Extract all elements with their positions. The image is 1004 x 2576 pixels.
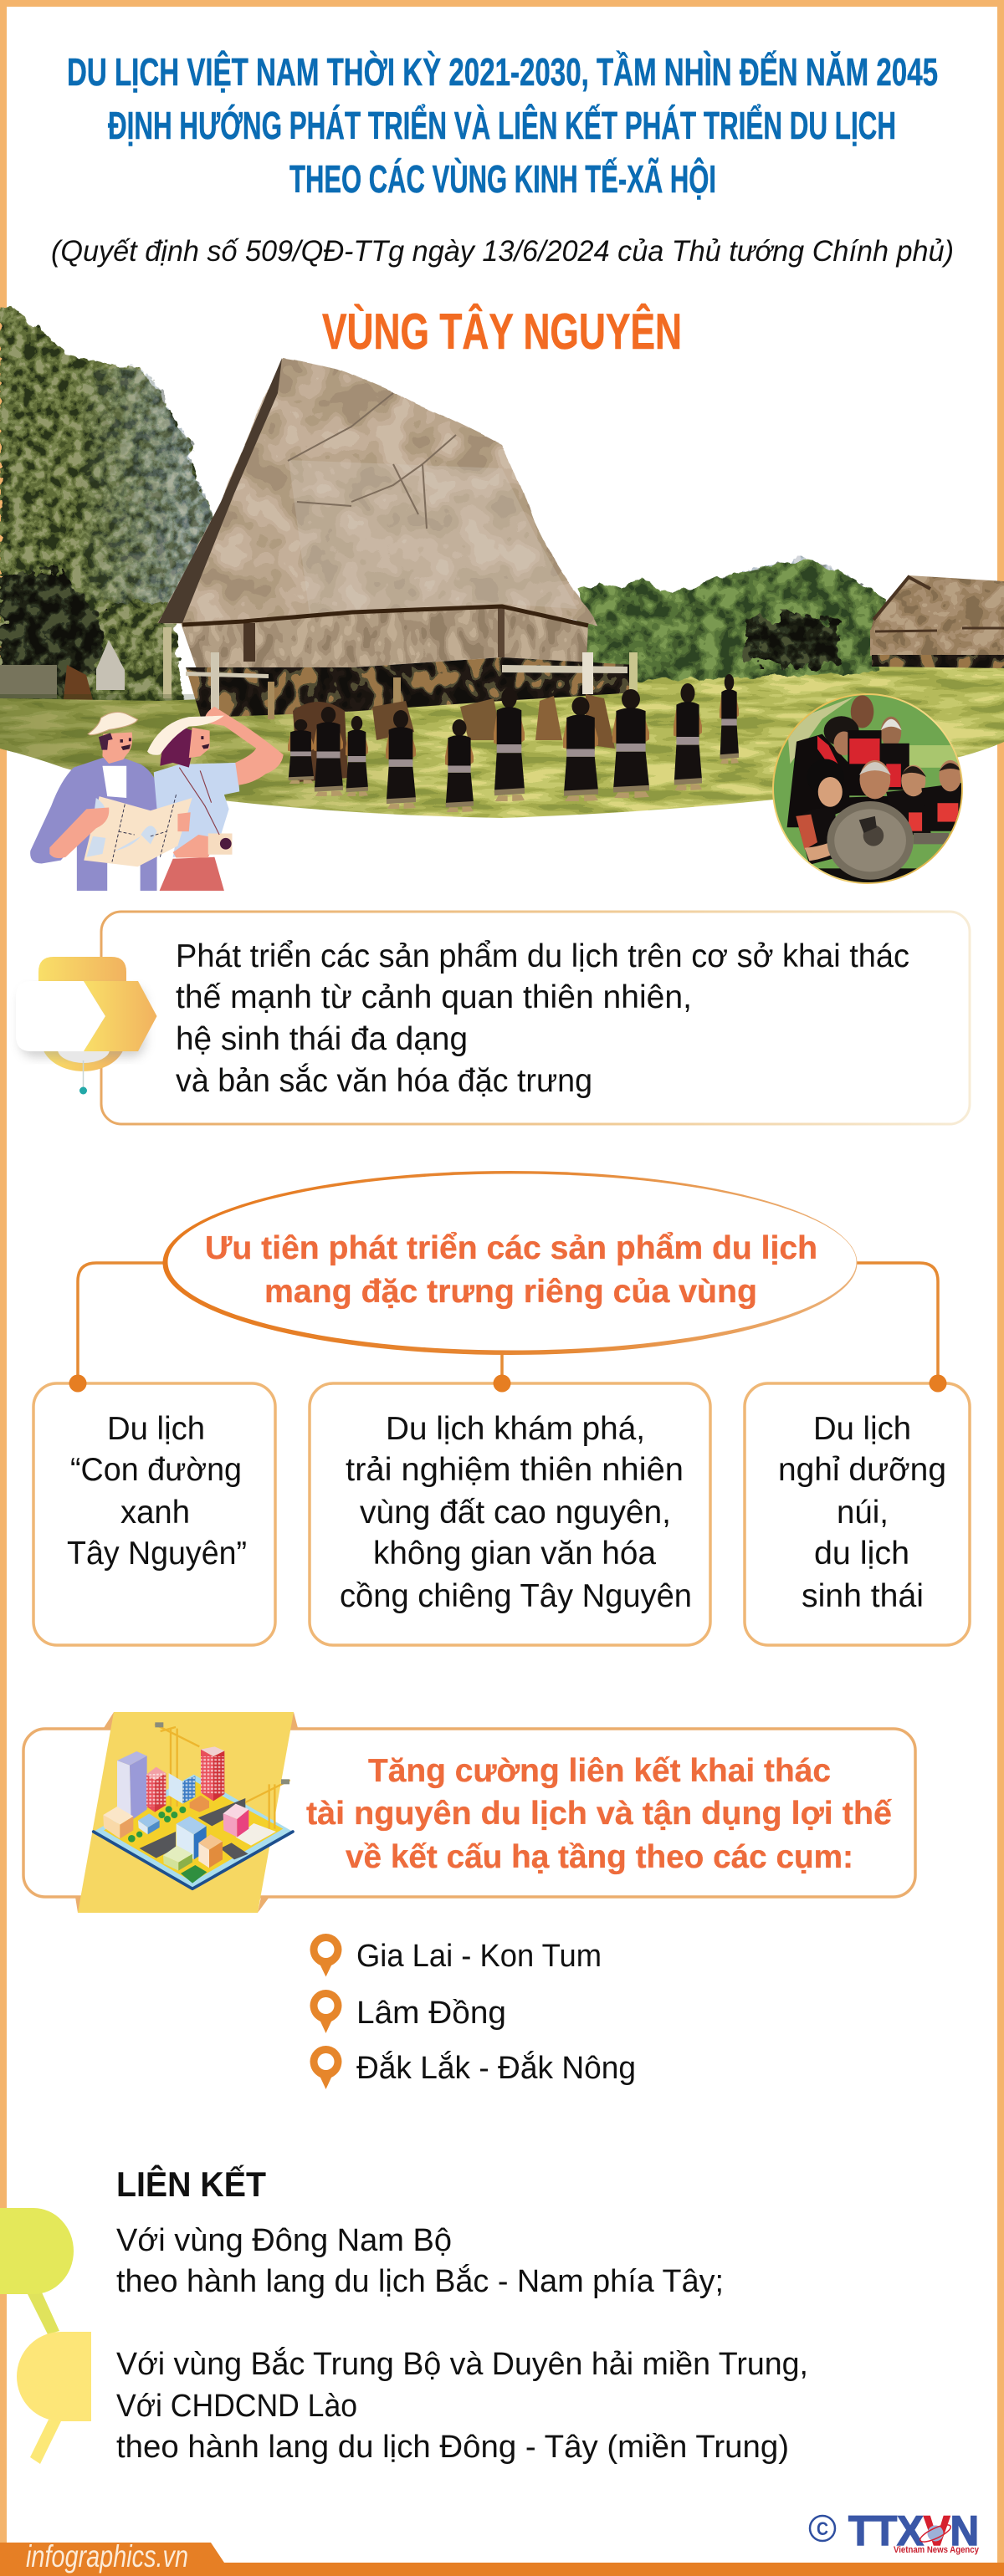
box: exploration tourism: cồng chiêng Tây Nguyên — [340, 1578, 692, 1614]
woman raised arm — [205, 707, 284, 785]
subtitle: decision reference: (Quyết định số 509/QĐ-TTg ngày 13/6/2024 của Thủ tướng Chính phủ) — [51, 235, 954, 268]
camera — [208, 833, 232, 855]
icon: two tourists with map — [30, 707, 284, 891]
box: exploration tourism: không gian văn hóa — [373, 1536, 656, 1572]
shop — [138, 1821, 148, 1834]
background forest — [577, 559, 886, 682]
hero scene: Central Highlands communal house — [0, 307, 1004, 828]
small orange building — [190, 1796, 209, 1812]
footer bar — [0, 2539, 1004, 2576]
box: mountain resort tourism: Du lịch — [813, 1411, 911, 1447]
box: mountain resort tourism: sinh thái — [802, 1578, 924, 1614]
man shirt — [30, 758, 160, 891]
panel text: Phát triển các sản phẩm du lịch trên cơ sở khai thác — [176, 938, 909, 974]
box: mountain resort tourism — [745, 1383, 970, 1645]
copyright symbol: C — [817, 2518, 828, 2539]
link text block: theo hành lang du lịch Bắc - Nam phía Tây; — [116, 2263, 724, 2299]
panel text: thế mạnh từ cảnh quan thiên nhiên, — [176, 979, 692, 1015]
cluster: Gia Lai - Kon Tum: Gia Lai - Kon Tum — [356, 1939, 602, 1974]
man hat — [88, 712, 138, 735]
link text block — [116, 2223, 808, 2465]
camera lens — [220, 838, 232, 850]
panel text: và bản sắc văn hóa đặc trưng — [176, 1063, 592, 1099]
woman top — [154, 763, 239, 857]
decorative lollipop shapes — [0, 2208, 91, 2464]
title: THEO CÁC VÙNG KINH TẾ-XÃ HỘI — [289, 157, 716, 201]
group photo: gong players — [772, 693, 965, 887]
box: mountain resort tourism: núi, — [837, 1495, 889, 1531]
woman hand on map — [177, 812, 191, 831]
cluster list — [310, 1934, 636, 2089]
panel text — [306, 1753, 892, 1875]
title — [67, 50, 938, 201]
icon: isometric city — [94, 1722, 293, 1889]
map — [84, 796, 192, 866]
woman eyes and smile — [201, 736, 209, 749]
dark green garden — [181, 1865, 207, 1883]
ellipse heading: priority products: Ưu tiên phát triển các sản phẩm du lịch — [205, 1230, 817, 1266]
panel text: Tăng cường liên kết khai thác — [368, 1753, 831, 1789]
tall lavender tower — [117, 1761, 131, 1821]
window grids on towers — [146, 1756, 224, 1807]
icon: pin 2 — [310, 1990, 341, 2033]
link text block: Với vùng Bắc Trung Bộ và Duyên hải miền Trung, — [116, 2346, 808, 2382]
platform — [94, 1775, 293, 1889]
heading: LIÊN KẾT — [116, 2164, 266, 2204]
panel: development direction — [16, 912, 970, 1124]
panel border — [23, 1729, 915, 1897]
copyright symbol — [810, 2516, 835, 2541]
icon: pin 1 — [310, 1934, 341, 1977]
background hut and tree trunk — [0, 627, 172, 700]
connector dots — [69, 1375, 947, 1392]
box: exploration tourism: Du lịch khám phá, — [386, 1411, 645, 1447]
crane two — [245, 1780, 290, 1829]
pink building — [223, 1813, 237, 1837]
man face details — [120, 738, 131, 750]
blue centre building — [177, 1824, 194, 1859]
map fold lines — [112, 795, 176, 862]
icon: pin 3 — [310, 2046, 341, 2089]
man hair — [99, 733, 113, 750]
ellipse heading: priority products: mang đặc trưng riêng của vùng — [264, 1274, 757, 1310]
footer bar: infographics.vn — [26, 2539, 188, 2573]
right house — [870, 575, 1004, 668]
cluster: Lam Dong: Lâm Đồng — [356, 1996, 506, 2031]
man t-shirt — [102, 766, 141, 891]
crane one — [155, 1725, 199, 1807]
camera strap — [179, 768, 219, 835]
under-floor stilts — [186, 652, 638, 719]
blue building under construction — [169, 1773, 182, 1804]
woman hair — [160, 726, 197, 768]
man head — [102, 733, 132, 764]
wordmark: TTXVN — [848, 2507, 979, 2554]
box: exploration tourism — [310, 1383, 710, 1645]
woman face — [189, 728, 210, 758]
woman skirt — [160, 857, 224, 891]
trees — [128, 1806, 186, 1843]
communal house roof — [158, 358, 598, 625]
box: mountain resort tourism: du lịch — [814, 1536, 909, 1572]
red short tower — [146, 1775, 155, 1812]
woman hat — [147, 716, 224, 755]
low cream building — [103, 1815, 120, 1838]
ribbon folds — [75, 1712, 298, 1913]
box: exploration tourism: trải nghiệm thiên nhiên — [346, 1452, 684, 1488]
panel text: về kết cấu hạ tầng theo các cụm: — [346, 1839, 853, 1875]
orange right building — [198, 1843, 209, 1868]
yellow parallelogram — [78, 1712, 294, 1913]
box: green road tourism: Du lịch — [107, 1411, 205, 1447]
box: green road tourism: xanh — [120, 1495, 190, 1531]
green low building — [163, 1855, 178, 1871]
icon: chevron badge — [16, 957, 157, 1094]
link text block: Với vùng Đông Nam Bộ — [116, 2223, 452, 2258]
globe — [918, 2522, 953, 2545]
link text block: theo hành lang du lịch Đông - Tây (miền Trung) — [116, 2430, 789, 2465]
section: links — [116, 2164, 808, 2465]
tagline: Vietnam News Agency — [894, 2545, 980, 2555]
box: exploration tourism: vùng đất cao nguyên, — [360, 1495, 671, 1531]
connectors from ellipse to boxes — [78, 1263, 938, 1383]
logo: TTXVN — [810, 2507, 980, 2555]
box: green road tourism — [33, 1383, 275, 1645]
man forearm and hand — [49, 807, 109, 858]
box: green road tourism: “Con đường — [70, 1452, 242, 1488]
box: mountain resort tourism: nghỉ dưỡng — [778, 1452, 946, 1488]
cluster: Dak Lak - Dak Nong: Đắk Lắk - Đắk Nông — [356, 2050, 636, 2086]
panel: strengthening links — [23, 1712, 915, 1913]
panel text: tài nguyên du lịch và tận dụng lợi thế — [306, 1796, 892, 1832]
ellipse heading: priority products — [162, 1171, 857, 1355]
house wall and eave — [181, 606, 588, 669]
panel text: hệ sinh thái đa dạng — [176, 1021, 468, 1057]
panel text — [176, 938, 909, 1099]
panel border — [101, 912, 970, 1124]
box: green road tourism: Tây Nguyên” — [67, 1536, 247, 1572]
woman lower arm — [173, 835, 216, 858]
left tree — [0, 307, 219, 757]
map details — [86, 798, 157, 857]
region name: VÙNG TÂY NGUYÊN — [322, 304, 682, 360]
dancers circle — [286, 674, 740, 812]
grass field — [0, 662, 1004, 828]
link text block: Với CHDCND Lào — [116, 2389, 357, 2424]
red tall tower — [201, 1750, 213, 1801]
